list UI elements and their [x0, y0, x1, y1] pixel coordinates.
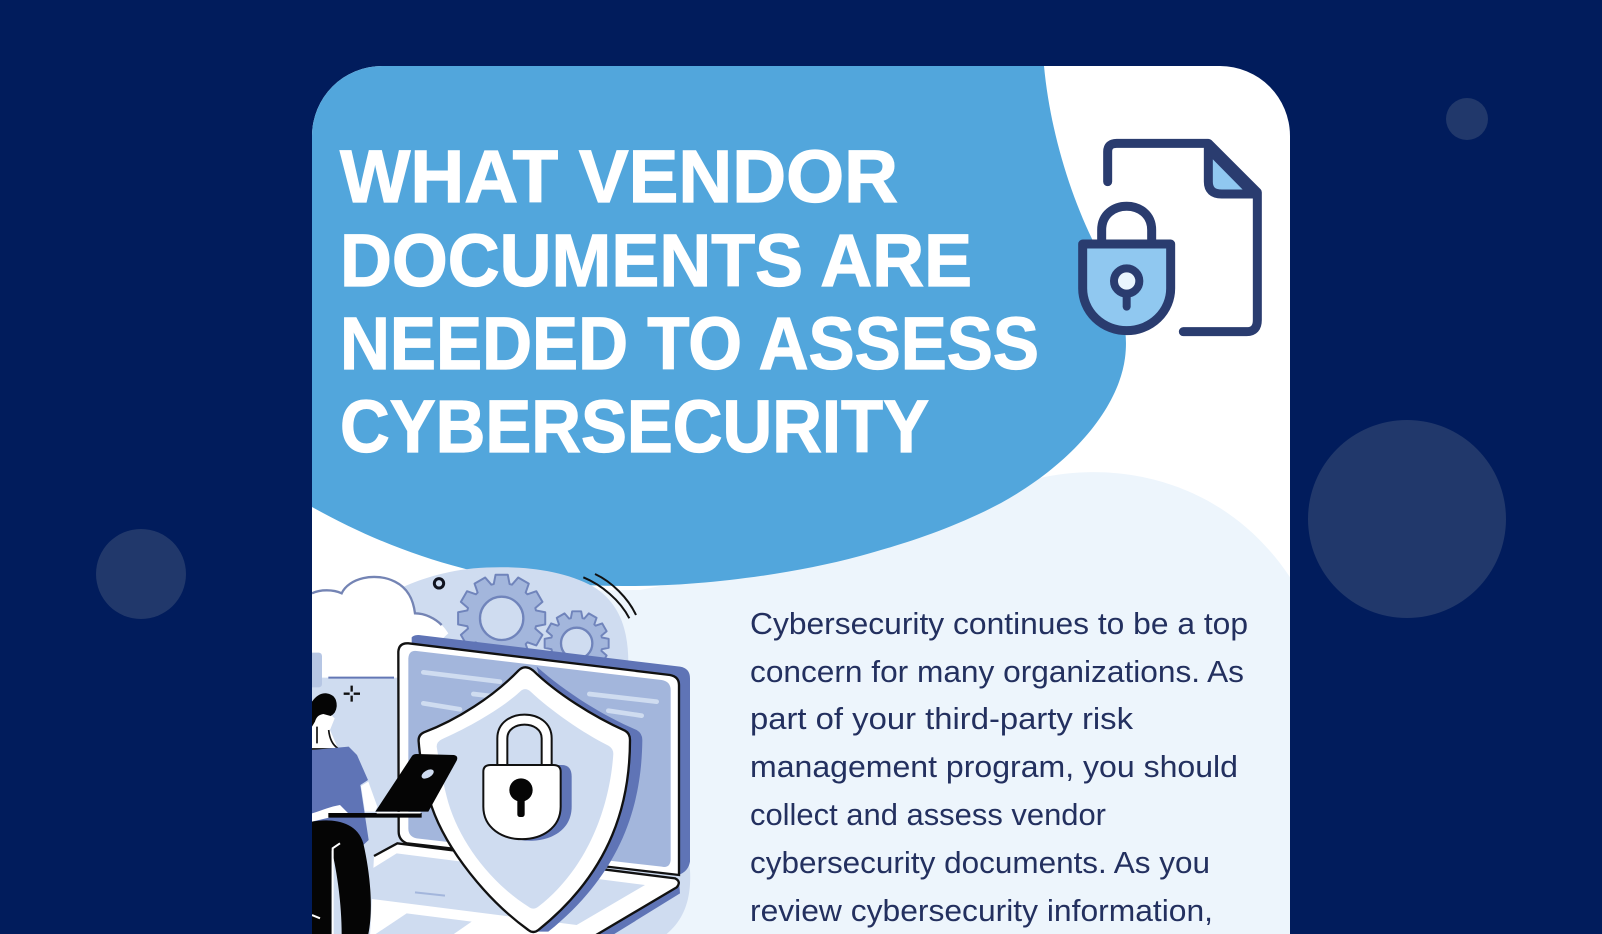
touchpad [372, 913, 472, 934]
screen panel [408, 651, 671, 867]
sparkle [344, 686, 360, 702]
document outline [1108, 143, 1257, 332]
illustration: cybersecurity laptop and shield [307, 567, 690, 934]
cloud baseline [328, 676, 394, 679]
title: DOCUMENTS ARE [340, 219, 972, 302]
body text: collect and assess vendor [750, 798, 1106, 832]
icon: locked document [1083, 143, 1257, 332]
decorative circle: left [96, 529, 186, 619]
body text: cybersecurity documents. As you [750, 846, 1210, 880]
laptop screen [398, 643, 679, 875]
decorative circle: top right [1446, 98, 1488, 140]
screen text lines [423, 672, 657, 716]
body text: concern for many organizations. As [750, 655, 1244, 689]
panel: white card [307, 66, 1295, 934]
person [312, 693, 377, 934]
shield shadow [533, 667, 642, 932]
illustration back blob [312, 567, 690, 934]
small laptop [328, 754, 457, 815]
small gear [544, 610, 610, 658]
light blue lower background [600, 472, 1290, 934]
body text: part of your third-party risk [750, 702, 1134, 736]
shield inner [437, 689, 613, 909]
title: CYBERSECURITY [340, 385, 929, 468]
document fold [1208, 148, 1253, 194]
shield [419, 667, 630, 932]
body text: management program, you should [750, 750, 1238, 784]
padlock [483, 715, 572, 841]
decorative circle: large right [1308, 420, 1506, 618]
keyboard deck [367, 853, 645, 925]
large gear [457, 574, 546, 648]
laptop screen shadow [412, 635, 690, 875]
body text: review cybersecurity information, [750, 894, 1213, 928]
signal arcs [583, 574, 636, 618]
title: WHAT VENDOR [340, 135, 898, 218]
cloud [312, 588, 448, 678]
body text: Cybersecurity continues to be a top [750, 607, 1248, 641]
blue header blob [312, 66, 1126, 586]
laptop base [370, 843, 679, 934]
lock body [1083, 244, 1171, 331]
body text [750, 607, 1248, 928]
keyhole [1114, 268, 1139, 294]
small ring [434, 579, 444, 588]
title: NEEDED TO ASSESS [340, 302, 1039, 385]
title [340, 135, 1039, 468]
lock shackle [1102, 206, 1152, 242]
small tag [312, 652, 322, 688]
